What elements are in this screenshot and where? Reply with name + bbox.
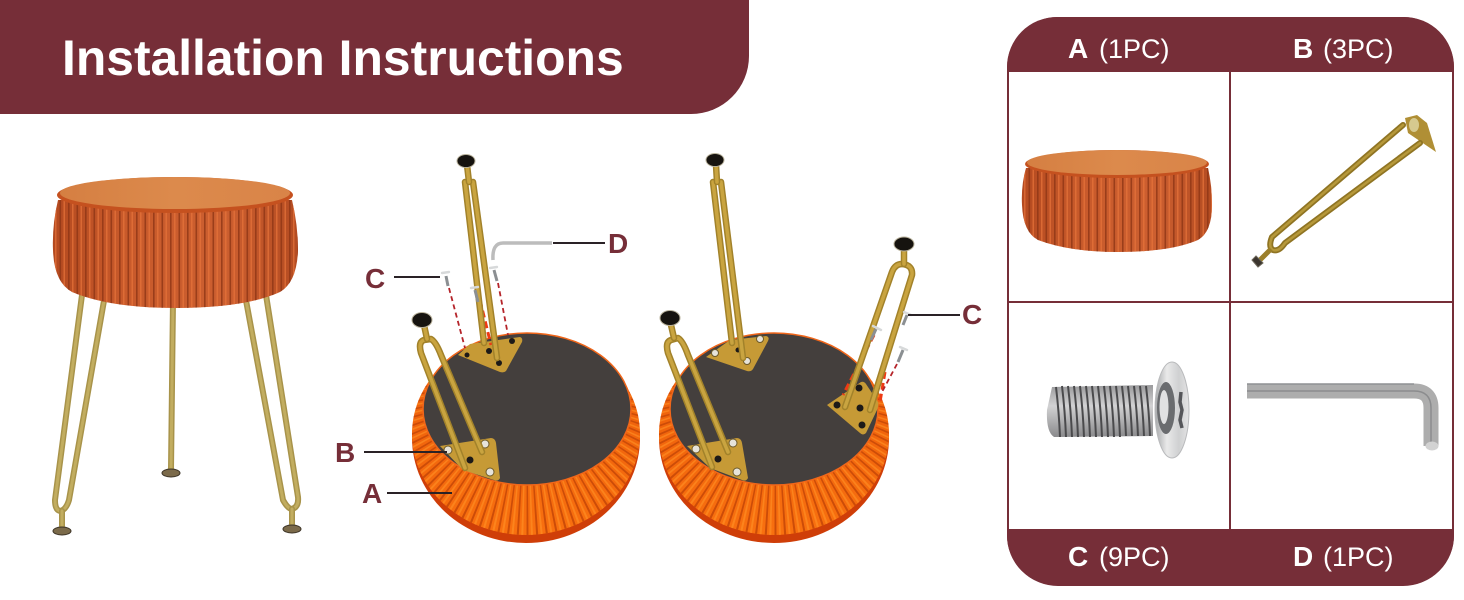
cushion body	[412, 332, 640, 543]
part A cushion	[1022, 150, 1212, 252]
part B leg	[1252, 115, 1436, 267]
label A: (1PC)	[1099, 34, 1170, 64]
label B: B	[1293, 33, 1313, 64]
label D: D	[1293, 541, 1313, 572]
upside-down stool step 2	[659, 154, 982, 543]
parts panel	[1007, 17, 1454, 586]
screws	[871, 312, 911, 392]
label B: (3PC)	[1323, 34, 1394, 64]
upside-down stool step 1	[335, 154, 640, 543]
stool cushion	[53, 177, 298, 308]
callout D: D	[608, 228, 628, 259]
callout line	[908, 314, 960, 316]
callout C: C	[962, 299, 982, 330]
front leg	[412, 312, 500, 481]
screws and hex key	[442, 243, 552, 348]
header band	[1007, 17, 1454, 72]
callout B: B	[335, 437, 355, 468]
callout lines	[364, 243, 605, 493]
callout A: A	[362, 478, 382, 509]
cushion body	[659, 332, 889, 543]
front leg	[660, 310, 748, 481]
leg being installed	[827, 237, 914, 434]
label C: C	[1068, 541, 1088, 572]
title text: Installation Instructions	[62, 30, 624, 86]
title banner	[0, 0, 749, 114]
stool legs	[53, 295, 301, 535]
label D: (1PC)	[1323, 542, 1394, 572]
assembled stool	[53, 177, 301, 535]
back leg	[706, 154, 769, 371]
footer band	[1007, 529, 1454, 586]
label C: (9PC)	[1099, 542, 1170, 572]
callout C: C	[365, 263, 385, 294]
back leg	[457, 154, 522, 372]
part C screw	[1047, 362, 1189, 458]
part D hex key	[1247, 384, 1438, 450]
label A: A	[1068, 33, 1088, 64]
